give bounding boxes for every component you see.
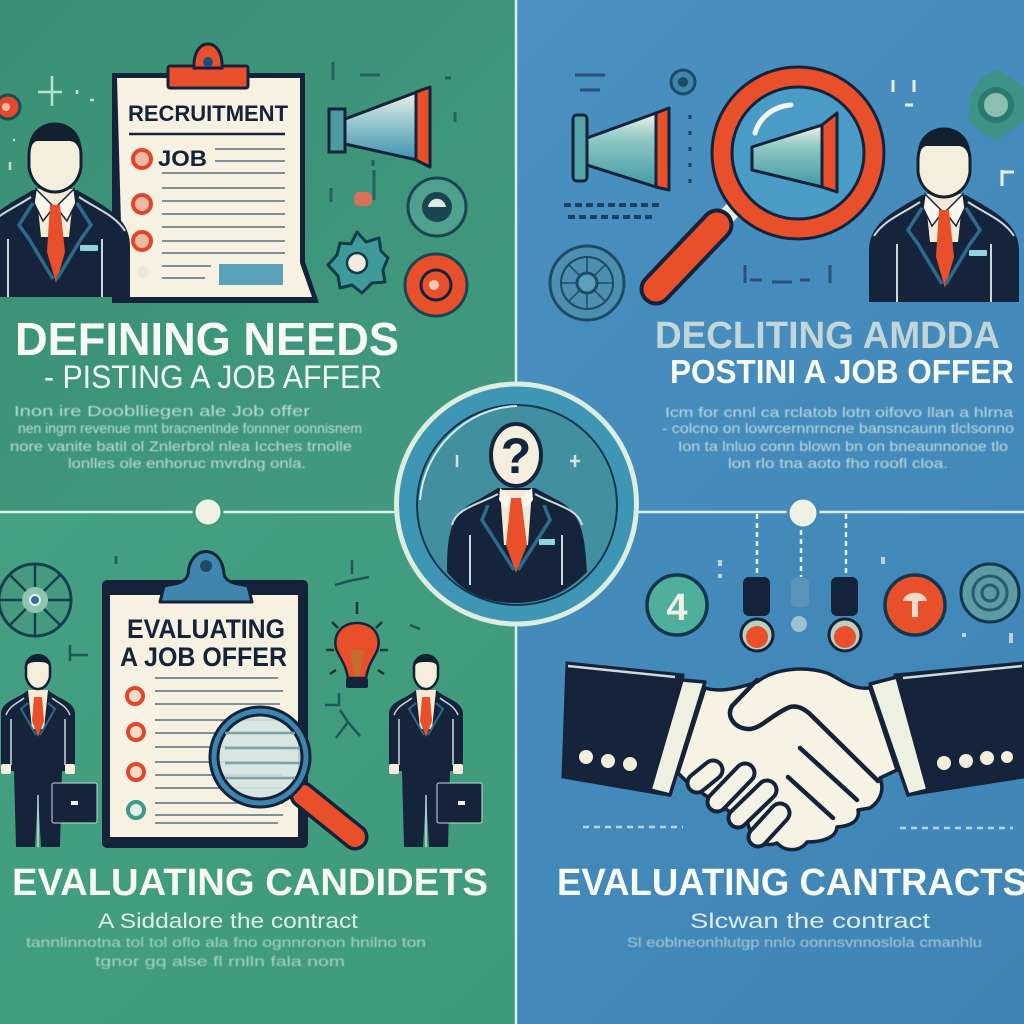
text block: bottom-left body: tgnor gq alse fl rnlln fala nom bbox=[95, 953, 345, 969]
icon: spiral badge bbox=[961, 564, 1019, 622]
sparks in circle bbox=[457, 455, 580, 467]
text block: top-left body: lonlles ole enhoruc mvrdng onla. bbox=[68, 455, 306, 471]
person with question mark: ? bbox=[501, 428, 531, 484]
fingers bbox=[697, 770, 780, 837]
subheading: bottom-left: A Siddalore the contract bbox=[98, 910, 358, 933]
small marks bbox=[331, 62, 455, 202]
panel: central candidate circle bbox=[396, 384, 636, 624]
panel: defining needs illustration bbox=[0, 44, 467, 316]
text block: top-right body: Ion ta lnluo conn blown bn on bneaunnonoe tlo bbox=[678, 438, 1008, 454]
panel: bottom-right blue background bbox=[517, 512, 1024, 1024]
icon: green badge bbox=[408, 178, 466, 236]
cuff buttons right bbox=[937, 751, 1013, 770]
icon: hanging bulb middle bbox=[791, 578, 809, 632]
heading: top-right: DECLITING AMDDA bbox=[655, 315, 1000, 357]
subheading: bottom-right: Slcwan the contract bbox=[690, 910, 930, 933]
handshake bbox=[563, 663, 1023, 850]
text block: top-right body: lon rlo tna aoto fho roofl cloa. bbox=[728, 455, 948, 471]
text block: top-left body bbox=[10, 403, 362, 471]
heading: defining needs: DEFINING NEEDS bbox=[15, 313, 399, 365]
clipboard with recruitment sheet: JOB bbox=[158, 146, 207, 171]
text block: bottom-right body: Sl eoblneonhlutgp nnlo oonnsvnnoslola cmanhlu bbox=[627, 934, 982, 950]
icon: hanging bulb right bbox=[829, 577, 861, 651]
panel: top-right blue background bbox=[517, 0, 1024, 512]
text block: top-right body: Icm for cnnl ca rclatob lotn oifovo llan a hlrna bbox=[665, 404, 1013, 420]
icon: small red dot bbox=[0, 95, 20, 119]
small marks bbox=[720, 557, 1011, 643]
text block: top-right body bbox=[662, 404, 1014, 471]
connector node right bbox=[788, 498, 818, 528]
text block: top-left body: Inon ire Dooblliegen ale Job offer bbox=[14, 403, 310, 420]
icon: small dial bbox=[671, 70, 695, 94]
icon: magnifying glass bbox=[656, 77, 874, 289]
text block: top-left body: nore vanite batil ol Znlerbrol nlea Icches trnolle bbox=[10, 438, 352, 454]
heading: evaluating candidates: EVALUATING CANDIDETS bbox=[12, 862, 488, 904]
clipboard with recruitment sheet: RECRUITMENT bbox=[128, 101, 289, 126]
icon: hanging bulb left bbox=[741, 577, 773, 651]
panel: bottom-left green background bbox=[0, 512, 517, 1024]
person right bbox=[869, 128, 1019, 302]
icon: compass wheel bbox=[550, 246, 624, 320]
briefcase right bbox=[437, 783, 482, 823]
icon: megaphone bbox=[329, 87, 430, 167]
dotted hangers bbox=[757, 514, 846, 577]
briefcase left bbox=[52, 783, 97, 823]
icon: red badge bbox=[405, 254, 467, 316]
icon: green gear bbox=[968, 70, 1024, 140]
icon: teal badge: 4 bbox=[666, 587, 688, 629]
clipboard with evaluation sheet bbox=[102, 552, 308, 848]
text block: bottom-left body bbox=[26, 934, 426, 969]
person right bbox=[389, 654, 463, 847]
icon: gear bbox=[328, 232, 388, 293]
panel: posting job offer illustration bbox=[550, 70, 1024, 320]
faint marks under cuffs bbox=[583, 827, 1013, 828]
clipboard with recruitment sheet bbox=[112, 44, 319, 303]
clipboard with evaluation sheet: EVALUATING bbox=[127, 614, 285, 644]
connector node left bbox=[194, 498, 222, 526]
icon: teal badge bbox=[647, 575, 707, 635]
decorative sparks bbox=[10, 76, 94, 170]
small dark marks bbox=[564, 205, 659, 217]
panel: top-left green background bbox=[0, 0, 517, 512]
icon: light bulb bbox=[326, 602, 388, 688]
panel: evaluating candidates illustration bbox=[0, 552, 482, 848]
person left bbox=[0, 122, 130, 297]
subheading: top-right: POSTINI A JOB OFFER bbox=[670, 353, 1014, 390]
decorative network bbox=[70, 556, 420, 738]
subheading: posting a job: - PISTING A JOB AFFER bbox=[44, 359, 382, 395]
small red blot bbox=[354, 192, 372, 206]
clipboard with evaluation sheet: A JOB OFFER bbox=[120, 642, 287, 672]
icon: wheel bbox=[0, 564, 71, 636]
person left bbox=[1, 654, 75, 847]
cuff buttons left bbox=[579, 750, 637, 771]
icon: red badge bbox=[885, 575, 945, 635]
text block: top-left body: nen ingrn revenue mnt bracnentnde fonnner oonnisnem bbox=[18, 420, 362, 436]
small white marks bbox=[893, 80, 1014, 186]
panel: signing contract illustration bbox=[563, 514, 1023, 850]
person with question mark bbox=[447, 424, 587, 603]
icon: megaphone left bbox=[573, 108, 669, 190]
text block: top-right body: - colcno on lowrcernnrncne bansncaunn tlclsonno bbox=[662, 420, 1014, 436]
icon: magnifying glass bbox=[214, 711, 355, 837]
text block: bottom-left body: tannlinnotna tol tol oflo ala fno ognnronon hnilno ton bbox=[26, 934, 426, 950]
